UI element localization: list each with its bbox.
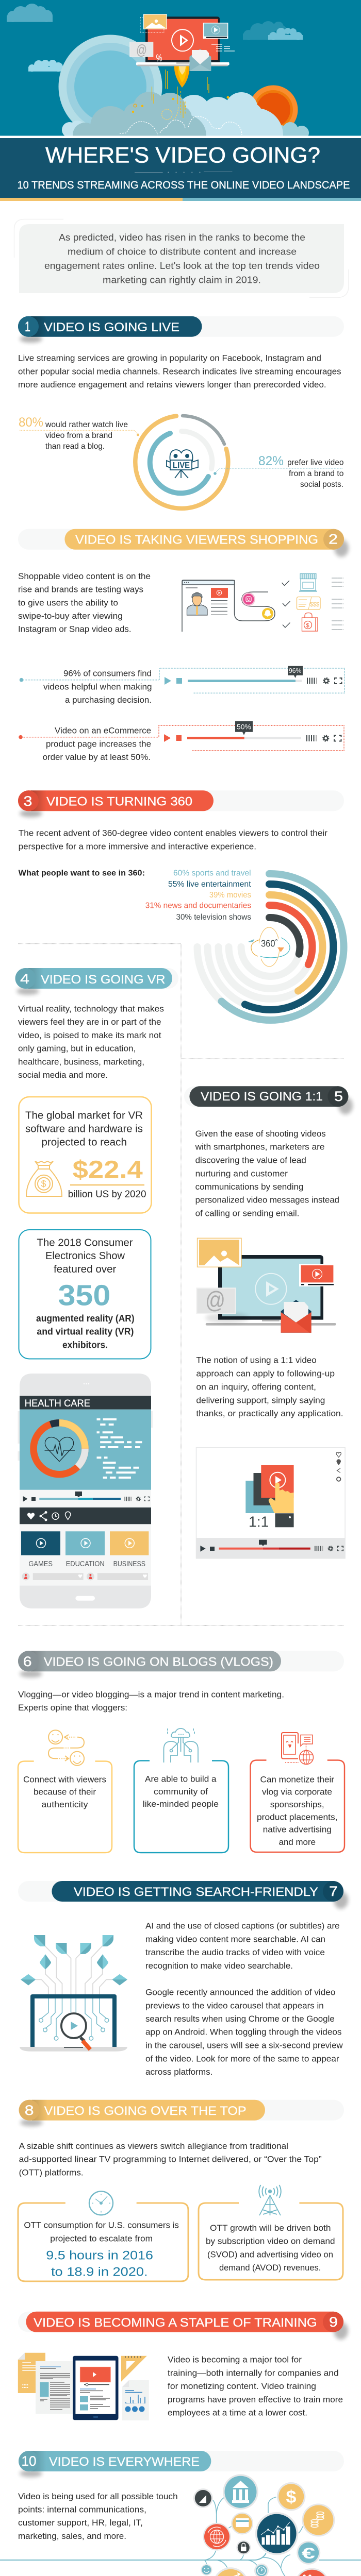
bubble: globe [203, 2523, 231, 2551]
section 5 text [195, 1129, 339, 1218]
icon: instagram [242, 592, 255, 606]
small back clouds [62, 121, 309, 140]
section 5 text: with smartphones, marketers are [195, 1142, 325, 1152]
side icons [336, 1452, 341, 1481]
icon: shopping bag [302, 613, 318, 631]
section 7 text: in the carousel, users will see a six-second preview [145, 2041, 343, 2050]
comment rows [22, 1572, 148, 1581]
stat: 80 percent: 80% [19, 415, 43, 430]
stat: 82 percent: prefer live video [287, 459, 344, 467]
phone header [20, 1396, 151, 1410]
bubble: bar chart [255, 2512, 298, 2555]
divider [135, 172, 232, 173]
intro text: marketing can rightly claim in 2019. [103, 275, 261, 285]
chart legend [145, 869, 251, 922]
card text: native advertising [263, 1825, 332, 1835]
section 5 text: nurturing and customer [195, 1168, 288, 1178]
section 5 header [184, 1086, 353, 1114]
image card [198, 1238, 241, 1267]
section 10 header [19, 2451, 344, 2477]
section 9 text: employees at a time at a lower cost. [168, 2408, 307, 2418]
subtitle: 10 TRENDS STREAMING ACROSS THE ONLINE VIDEO LANDSCAPE [18, 179, 350, 191]
bubble: credit card [231, 2512, 253, 2535]
grey circuit stems [36, 1946, 112, 1994]
bubble: lock [236, 2540, 251, 2555]
bubble: smile [201, 2564, 212, 2575]
chart legend: 39% movies [209, 891, 251, 900]
section 7 text: making video content more searchable. AI can [145, 1934, 325, 1944]
section 5 text: of calling or sending email. [195, 1209, 299, 1218]
section 10 text: Video is being used for all possible touch [18, 2492, 178, 2501]
section 6 text [18, 1689, 284, 1713]
1:1 video frame [196, 1448, 346, 1558]
card text [257, 1774, 337, 1847]
training illustration [18, 2353, 149, 2420]
bubble: euro: € [302, 2545, 315, 2562]
card text: and more [279, 1837, 316, 1847]
section 8 text: ad-supported linear TV programming to Internet delivered, or “Over the Top” [19, 2155, 322, 2164]
section 10 text: customer support, HR, legal, IT, [18, 2518, 143, 2528]
section 5 text: personalized video messages instead [195, 1195, 339, 1205]
card text: community of [154, 1787, 208, 1797]
data rows [97, 1418, 142, 1479]
section 10 header: 10 [22, 2453, 36, 2469]
section 9 text: programs have proven effective to train more [168, 2395, 343, 2404]
player: 50 percent [19, 721, 344, 751]
section 2 text: rise and brands are testing ways [18, 585, 143, 595]
laptop illustration [196, 1238, 336, 1333]
callout: CES exhibitors: Electronics Show [45, 1250, 125, 1262]
bubble: people [294, 2568, 330, 2576]
section 6 header: 6 [23, 1654, 32, 1669]
icon: 360 degree [249, 927, 290, 967]
callout: VR market [19, 1097, 152, 1213]
white dashed cloud lines [120, 116, 242, 135]
email card: @ [205, 1286, 225, 1313]
callout: CES exhibitors: 350 [58, 1279, 110, 1312]
card text: by subscription video on demand [206, 2236, 335, 2246]
phone player [23, 1492, 149, 1502]
intro text: engagement rates online. Let's look at the top ten trends video [44, 261, 320, 271]
icon: faces [48, 1730, 84, 1766]
callout: CES exhibitors: and virtual reality (VR) [37, 1326, 134, 1337]
section 1 header: 1 [25, 319, 30, 334]
card text: (SVOD) and advertising video on [207, 2249, 333, 2259]
video card [203, 23, 228, 39]
section 8 text: (OTT) platforms. [19, 2167, 84, 2177]
section 2 header: 2 [329, 532, 338, 547]
card text [143, 1774, 219, 1809]
section 9 text [168, 2355, 343, 2418]
teal circuit [39, 1998, 109, 2040]
player: 50 percent: 50% [237, 722, 251, 731]
section 1 text: Live streaming services are growing in popularity on Facebook, Instagram and [18, 353, 321, 363]
radial bar chart [197, 874, 344, 1020]
icon: money bag [26, 1161, 62, 1196]
section 4 header [15, 968, 178, 995]
section 9 text: for monetizing content. Video training [168, 2381, 316, 2391]
section 7 text: of the video. Look for more of the same to appear [145, 2054, 339, 2063]
phone mockup [18, 1374, 153, 1608]
category tiles [21, 1531, 149, 1568]
section 5 text continued: The notion of using a 1:1 video [196, 1355, 317, 1365]
leaves [21, 1935, 127, 1986]
video card [299, 1264, 334, 1286]
card text: vlog via corporate [262, 1787, 332, 1797]
email card: @ [136, 42, 147, 58]
bubble: euro [297, 2541, 320, 2565]
title band [0, 136, 361, 201]
icon: live camera: LIVE [173, 461, 190, 470]
icon: money bag: $ [41, 1179, 46, 1189]
icon: phone and globe [282, 1733, 314, 1764]
stat: 82 percent: from a brand to [289, 469, 344, 478]
search illustration [20, 1935, 127, 2052]
section 4 text: only gaming, but in education, [18, 1044, 136, 1054]
section 7 text: across platforms. [145, 2067, 212, 2077]
icon: snapchat [262, 608, 273, 619]
icon: shop [299, 574, 317, 591]
icon: shopping bag: $ [306, 622, 309, 629]
section 4 text: social media and more. [18, 1070, 108, 1080]
connector network [0, 2497, 361, 2576]
orange sun [249, 86, 298, 134]
card text [206, 2223, 335, 2273]
section 5 text continued [196, 1355, 343, 1418]
intro text: As predicted, video has risen in the ranks to become the [59, 232, 305, 243]
section 7 header [18, 1881, 348, 1909]
section 9 text: Video is becoming a major tool for [168, 2355, 302, 2365]
category tiles: GAMES [28, 1560, 53, 1568]
section 7 text: transcribe the audio tracks of video with voice [145, 1947, 325, 1957]
section 9 header: VIDEO IS BECOMING A STAPLE OF TRAINING [34, 2316, 317, 2330]
section 8 header: 8 [25, 2103, 34, 2118]
envelope [281, 1300, 311, 1333]
section 1 header [18, 316, 344, 343]
laptop frame [20, 1994, 127, 2052]
section 4 text: healthcare, business, marketing, [18, 1057, 144, 1066]
icon: pointing hand [269, 1483, 294, 1527]
yellow document [18, 2353, 45, 2393]
section 3 header [18, 790, 344, 817]
section 7 text: Google recently announced the addition of video [145, 1988, 335, 1997]
intro panel [14, 219, 349, 298]
section 6 text: Vlogging—or video blogging—is a major trend in content marketing. [18, 1689, 284, 1699]
callout: VR market: projected to reach [41, 1137, 127, 1148]
section 1 text: more audience engagement and retains viewers longer than prerecorded video. [18, 380, 326, 389]
section 7 header: VIDEO IS GETTING SEARCH-FRIENDLY [74, 1885, 318, 1899]
speed lines [211, 44, 235, 51]
envelope [189, 49, 211, 71]
section 5 header: 5 [334, 1089, 343, 1104]
chart heading: What people want to see in 360: [19, 869, 145, 877]
section 8 header [19, 2100, 344, 2126]
card text: like-minded people [143, 1799, 219, 1809]
shoppable video illustration [182, 574, 343, 632]
card text: Are able to build a [145, 1774, 217, 1784]
card: connect with viewers [18, 1730, 112, 1853]
section 5 text: Given the ease of shooting videos [195, 1129, 326, 1139]
section 5 text continued: approach can apply to following-up [196, 1369, 335, 1379]
stat: 96 percent: videos helpful when making [43, 682, 152, 691]
hero illustration [0, 0, 361, 162]
card: community [134, 1728, 228, 1853]
section 3 header: 3 [24, 793, 32, 809]
light cloud [178, 92, 283, 162]
chart legend: 55% live entertainment [168, 880, 251, 889]
section 2 text: Instagram or Snap video ads. [18, 624, 131, 634]
section 7 text: AI and the use of closed captions (or subtitles) are [145, 1921, 339, 1931]
section 2 text: swipe-to-buy after viewing [18, 611, 123, 621]
stat: 50 percent: order value by at least 50%. [43, 752, 151, 762]
laptop [136, 16, 229, 66]
image card [140, 14, 167, 32]
ratio label: 1:1 [249, 1514, 269, 1530]
highlighted figure [46, 2249, 153, 2279]
card text: OTT consumption for U.S. consumers is [24, 2221, 179, 2230]
rocket flame [174, 66, 189, 88]
list marks [332, 578, 343, 630]
stat: 80 percent: than read a blog. [45, 442, 105, 451]
bubble: analytics [193, 2488, 213, 2508]
chart document [122, 2380, 149, 2420]
section 10 text [18, 2492, 178, 2541]
magnifier [61, 2013, 90, 2049]
highlighted figure: to 18.9 in 2020. [51, 2265, 148, 2279]
icon: price card: $$$ [310, 601, 319, 608]
section 5 text continued: on an inquiry, offering content, [196, 1382, 316, 1392]
stat: 50 percent: product page increases the [46, 739, 151, 749]
section 7 text: recognition to make video searchable. [145, 1961, 293, 1971]
player [200, 1540, 343, 1552]
tablet [73, 2356, 119, 2420]
bubble: growth [213, 2567, 249, 2576]
section 9 header [18, 2312, 348, 2340]
section 2 text: Shoppable video content is on the [18, 571, 151, 581]
bubble: dollar: $ [286, 2487, 297, 2507]
card: OTT consumption [18, 2191, 188, 2281]
cloud top right [243, 21, 289, 40]
section 2 text [18, 571, 151, 634]
blue-grey cloud [73, 92, 206, 156]
card: OTT consumption: projected to escalate from [50, 2233, 153, 2243]
section 7 text: app on Android. When toggling through the videos [145, 2027, 341, 2037]
stat: 80 percent: video from a brand [45, 431, 112, 440]
chart legend: 30% television shows [176, 913, 251, 922]
icon: antenna tower [259, 2185, 281, 2215]
icon: 360 degree: 360 [261, 939, 275, 949]
grey document [36, 2361, 75, 2414]
intro text [44, 232, 320, 285]
section 8 text: A sizable shift continues as viewers switch allegiance from traditional [19, 2141, 288, 2151]
player: 96 percent: 96% [289, 667, 302, 674]
bubble: bank [223, 2474, 258, 2510]
section 4 text: Virtual reality, technology that makes [18, 1004, 164, 1013]
section 1 text [18, 353, 341, 389]
health panel [20, 1410, 151, 1490]
stat: 50 percent [19, 721, 344, 762]
percent sign: % [156, 53, 162, 64]
stat: 80 percent [19, 415, 139, 451]
callout: CES exhibitors: The 2018 Consumer [37, 1237, 133, 1248]
section 4 header: VIDEO IS GOING VR [41, 973, 165, 987]
card: OTT growth [199, 2185, 343, 2280]
section 4 text: viewers feel they are in or part of the [18, 1017, 161, 1027]
card text: sponsorships, [270, 1800, 324, 1809]
card text: authenticity [41, 1800, 88, 1809]
icon: live camera [167, 450, 198, 478]
email card [196, 1286, 249, 1323]
section 10 text: points: internal communications, [18, 2505, 146, 2515]
section 7 text: previews to the video carousel that appears in [145, 2001, 324, 2010]
section 1 text: other popular social media channels. Research indicates live streaming encourages [18, 366, 341, 376]
callout: VR market: software and hardware is [25, 1123, 143, 1134]
section 3 text: perspective for a more immersive and interactive experience. [19, 841, 256, 851]
section 5 header: VIDEO IS GOING 1:1 [201, 1090, 323, 1104]
stat: 82 percent: social posts. [300, 480, 343, 489]
card: monetize [251, 1733, 344, 1852]
section 2 header: VIDEO IS TAKING VIEWERS SHOPPING [75, 533, 318, 547]
phone action bar [20, 1507, 151, 1524]
small cloud left [28, 60, 63, 72]
phone header: HEALTH CARE [25, 1398, 90, 1409]
chart legend: 60% sports and travel [173, 869, 251, 877]
section 5 text continued: thanks, or practically any application. [196, 1409, 343, 1418]
intro text: medium of choice to distribute content and increase [68, 247, 297, 257]
browser window [182, 580, 275, 632]
icon: price card [297, 597, 320, 609]
colour stripe [0, 198, 361, 201]
section 4 text: video, is poised to make its mark not [18, 1030, 161, 1040]
callout: CES exhibitors: augmented reality (AR) [36, 1313, 135, 1324]
light cloud right [268, 28, 303, 40]
section 8 header: VIDEO IS GOING OVER THE TOP [44, 2104, 247, 2118]
player: 96 percent [20, 666, 344, 693]
category tiles: EDUCATION [66, 1560, 105, 1568]
ring chart: live video [135, 416, 228, 509]
section 3 text: The recent advent of 360-degree video content enables viewers to control their [19, 828, 327, 838]
stacked cards [245, 1465, 294, 1513]
section 7 text [145, 1921, 343, 2077]
category tiles: BUSINESS [113, 1560, 145, 1568]
callout: CES exhibitors: featured over [54, 1264, 117, 1275]
section 5 text: communications by sending [195, 1182, 303, 1192]
bubble: clock [254, 2564, 269, 2576]
section 3 header: VIDEO IS TURNING 360 [46, 794, 192, 808]
card text: because of their [34, 1787, 96, 1797]
touchpoint bubbles [193, 2474, 335, 2576]
section 9 header: 9 [329, 2314, 338, 2330]
dotted dividers [18, 944, 344, 1625]
chart legend: 31% news and documentaries [145, 902, 251, 910]
play button [255, 1274, 286, 1304]
title: WHERE'S VIDEO GOING? [45, 143, 320, 168]
person [187, 592, 207, 615]
section 3 text [19, 828, 327, 851]
section 6 text: Experts opine that vloggers: [18, 1703, 127, 1713]
card text: Connect with viewers [23, 1774, 106, 1784]
email card [130, 42, 153, 58]
section 5 text: discovering the value of lead [195, 1155, 306, 1165]
section 10 text: marketing, sales, and more. [18, 2531, 126, 2541]
card text: product placements, [257, 1812, 337, 1822]
bubble: coins [302, 2504, 335, 2537]
callout: VR market: The global market for VR [25, 1110, 143, 1122]
laptop base [206, 1320, 336, 1326]
section 7 text: search results when using Chrome or the Google [145, 2014, 335, 2024]
big blue sun [59, 35, 162, 138]
card text [23, 1774, 106, 1809]
triangle ruler [121, 2356, 147, 2382]
callout: CES exhibitors [19, 1230, 151, 1359]
card text: demand (AVOD) revenues. [219, 2263, 321, 2273]
highlighted figure: 9.5 hours in 2016 [46, 2249, 153, 2263]
callout: CES exhibitors: exhibitors. [62, 1340, 108, 1350]
section 4 text [18, 1004, 164, 1080]
stat: 96 percent: 96% of consumers find [63, 669, 152, 679]
section 7 header: 7 [329, 1884, 338, 1899]
icon: clock [89, 2191, 113, 2215]
stat value: $22.4 [73, 1157, 143, 1184]
section 2 text: to give users the ability to [18, 598, 118, 607]
card text: Can monetize their [260, 1774, 334, 1784]
stat: 80 percent: would rather watch live [45, 420, 128, 429]
stat: 96 percent [20, 666, 344, 705]
stat: 82 percent [214, 454, 344, 489]
section 1 header: VIDEO IS GOING LIVE [44, 320, 179, 334]
check marks [282, 581, 290, 628]
section 9 text: training—both internally for companies and [168, 2368, 339, 2378]
section 6 header: VIDEO IS GOING ON BLOGS (VLOGS) [44, 1655, 273, 1669]
stat: 82 percent: 82% [258, 454, 284, 468]
donut chart [34, 1423, 85, 1475]
stat: 96 percent: a purchasing decision. [65, 695, 152, 705]
section 6 header [18, 1651, 344, 1677]
bubble: dollar [277, 2482, 305, 2511]
cloud top left [7, 4, 53, 22]
rocket sparks [134, 70, 209, 120]
card text: OTT growth will be driven both [210, 2223, 331, 2233]
section 10 header: VIDEO IS EVERYWHERE [49, 2455, 200, 2469]
section 2 header [18, 529, 349, 557]
section 8 text [19, 2141, 322, 2177]
video tile [211, 588, 228, 598]
section 4 header: 4 [20, 971, 29, 987]
stat: 50 percent: Video on an eCommerce [55, 725, 151, 735]
icon: brain and lungs [164, 1728, 198, 1762]
icon: heart beat [44, 1437, 75, 1462]
callout: VR market: billion US by 2020 [68, 1189, 146, 1200]
section 5 text continued: delivering support, simply saying [196, 1395, 325, 1405]
